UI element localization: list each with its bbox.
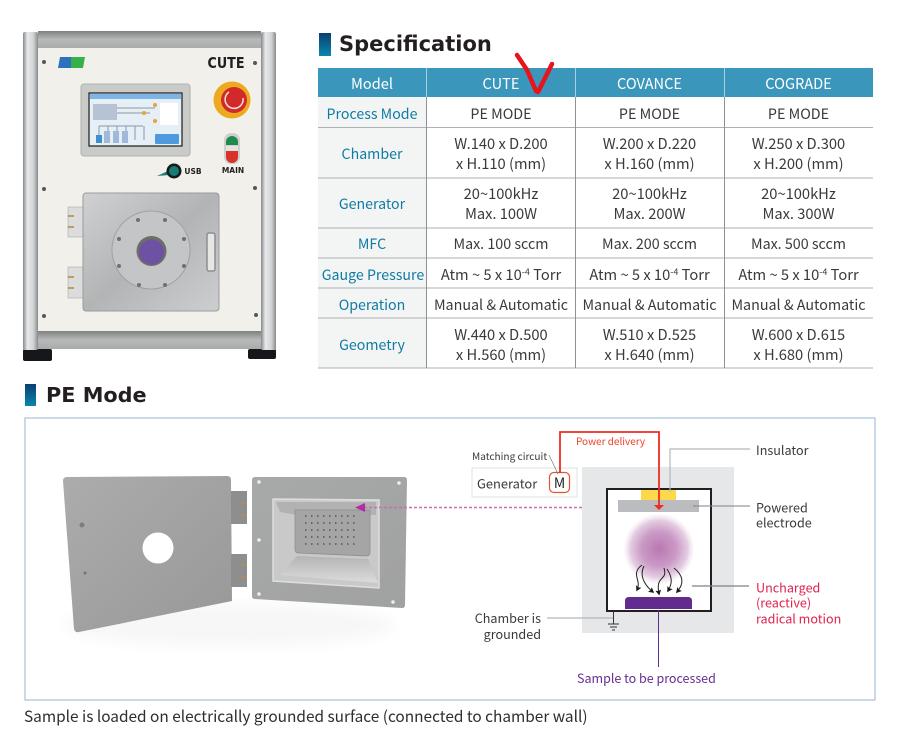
heading: Specification: Specification	[339, 32, 492, 56]
row: MFC	[358, 233, 846, 254]
row: process mode: PE MODE	[768, 103, 829, 124]
insulator	[641, 490, 676, 500]
row: chamber: W.140 x D.200	[454, 133, 548, 154]
label: chamber grounded with ground symbol	[475, 608, 619, 643]
label: insulator: Insulator	[756, 440, 809, 459]
row: process mode: PE MODE	[619, 103, 680, 124]
row: process mode: PE MODE	[470, 103, 532, 124]
row: geometry	[339, 324, 845, 365]
generator box	[472, 468, 577, 497]
label: chamber grounded with ground symbol: grounded	[484, 624, 541, 643]
row: operation	[339, 294, 866, 315]
screws	[42, 60, 258, 318]
row: chamber: x H.110 (mm)	[456, 153, 546, 174]
row: operation: Manual & Automatic	[434, 294, 568, 315]
chamber perforations	[305, 516, 358, 544]
main switch: MAIN	[222, 166, 244, 175]
row: MFC: Max. 500 sccm	[751, 233, 846, 254]
label: powered electrode: electrode	[756, 512, 812, 532]
row: generator: Generator	[339, 194, 406, 214]
power delivery line: Power delivery	[576, 433, 646, 448]
plasma glow	[624, 514, 694, 584]
row: generator	[339, 183, 836, 224]
label: matching circuit: Matching circuit	[472, 448, 547, 463]
row: chamber: x H.160 (mm)	[604, 153, 695, 174]
row: generator: Max. 200W	[613, 203, 686, 224]
row: MFC: Max. 200 sccm	[602, 233, 697, 254]
row: chamber: W.250 x D.300	[752, 133, 845, 154]
label: radical motion: Uncharged	[756, 578, 820, 596]
table header: CUTE	[483, 73, 519, 94]
row: gauge pressure: Atm ~ 5 x 10	[589, 264, 670, 285]
label: radical motion: (reactive)	[756, 592, 811, 612]
chamber door	[68, 193, 219, 311]
dashed connector arrow	[355, 503, 628, 512]
row: gauge pressure: Gauge Pressure	[322, 265, 424, 285]
powered electrode	[618, 500, 699, 512]
label: radical motion: radical motion	[756, 608, 841, 628]
photo: open chamber	[63, 476, 407, 647]
row: geometry: x H.640 (mm)	[604, 344, 695, 365]
sample	[625, 597, 692, 609]
table header	[318, 68, 873, 97]
chamber background	[582, 467, 734, 633]
row: gauge pressure: Atm ~ 5 x 10	[738, 264, 819, 285]
panel: PE mode diagram	[25, 418, 875, 700]
generator box: M	[554, 473, 565, 493]
row: process mode: Process Mode	[327, 104, 418, 124]
table header: Model	[351, 73, 393, 94]
row: gauge pressure: -4	[522, 265, 530, 278]
chamber wall	[607, 489, 711, 611]
red hand-drawn check mark	[517, 55, 552, 92]
row: geometry: W.600 x D.615	[752, 324, 845, 345]
row: chamber: W.200 x D.220	[603, 133, 696, 154]
label: chamber grounded with ground symbol: Chamber is	[475, 608, 541, 627]
row: generator: Max. 300W	[762, 203, 835, 224]
row: geometry: W.440 x D.500	[454, 324, 548, 345]
USB connector: USB	[184, 167, 202, 176]
emergency stop	[214, 82, 250, 118]
label: powered electrode	[693, 498, 812, 532]
row: gauge pressure: Torr	[827, 264, 859, 285]
row: chamber: Chamber	[342, 144, 403, 164]
label: insulator	[670, 440, 809, 492]
row: chamber	[342, 133, 845, 174]
USB connector	[157, 164, 202, 178]
photo: CUTE plasma machine	[23, 31, 276, 361]
row: geometry: Geometry	[339, 335, 405, 355]
row: generator: Max. 100W	[465, 203, 537, 224]
label: sample	[577, 610, 716, 687]
generator box: Generator	[477, 474, 538, 492]
row: operation: Operation	[339, 295, 405, 315]
row: operation: Manual & Automatic	[582, 294, 717, 315]
label: powered electrode: Powered	[756, 498, 808, 516]
row: geometry: x H.680 (mm)	[753, 344, 844, 365]
row: generator: 20~100kHz	[464, 183, 538, 204]
row: generator: 20~100kHz	[761, 183, 836, 204]
label: matching circuit	[472, 448, 558, 474]
heading: PE Mode: PE Mode	[46, 383, 147, 407]
row: gauge pressure	[322, 264, 859, 285]
row: operation: Manual & Automatic	[731, 294, 866, 315]
row: MFC: Max. 100 sccm	[453, 233, 549, 254]
main switch	[222, 133, 244, 175]
logo	[58, 57, 85, 68]
row: process mode	[327, 103, 829, 124]
row: gauge pressure: Torr	[530, 264, 561, 285]
label: radical motion	[692, 578, 841, 628]
row: gauge pressure: -4	[670, 265, 678, 278]
row: gauge pressure: Torr	[678, 264, 710, 285]
machine name: CUTE	[208, 54, 244, 72]
row: geometry: W.510 x D.525	[603, 324, 696, 345]
touch screen	[81, 84, 190, 156]
radical motion arrows	[636, 565, 682, 594]
table header: COVANCE	[617, 73, 682, 94]
row: geometry: x H.560 (mm)	[456, 344, 546, 365]
row: generator: 20~100kHz	[612, 183, 687, 204]
row: chamber: x H.200 (mm)	[753, 153, 844, 174]
caption: Sample is loaded on electrically grounded surface (connected to chamber wall)	[24, 705, 588, 727]
machine feet	[23, 349, 276, 361]
row: MFC: MFC	[358, 234, 386, 254]
table header: COGRADE	[765, 73, 832, 94]
label: sample: Sample to be processed	[577, 668, 716, 687]
power delivery line	[560, 432, 664, 510]
row: gauge pressure: -4	[819, 265, 827, 278]
row: gauge pressure: Atm ~ 5 x 10	[441, 264, 522, 285]
specification table	[318, 68, 873, 368]
